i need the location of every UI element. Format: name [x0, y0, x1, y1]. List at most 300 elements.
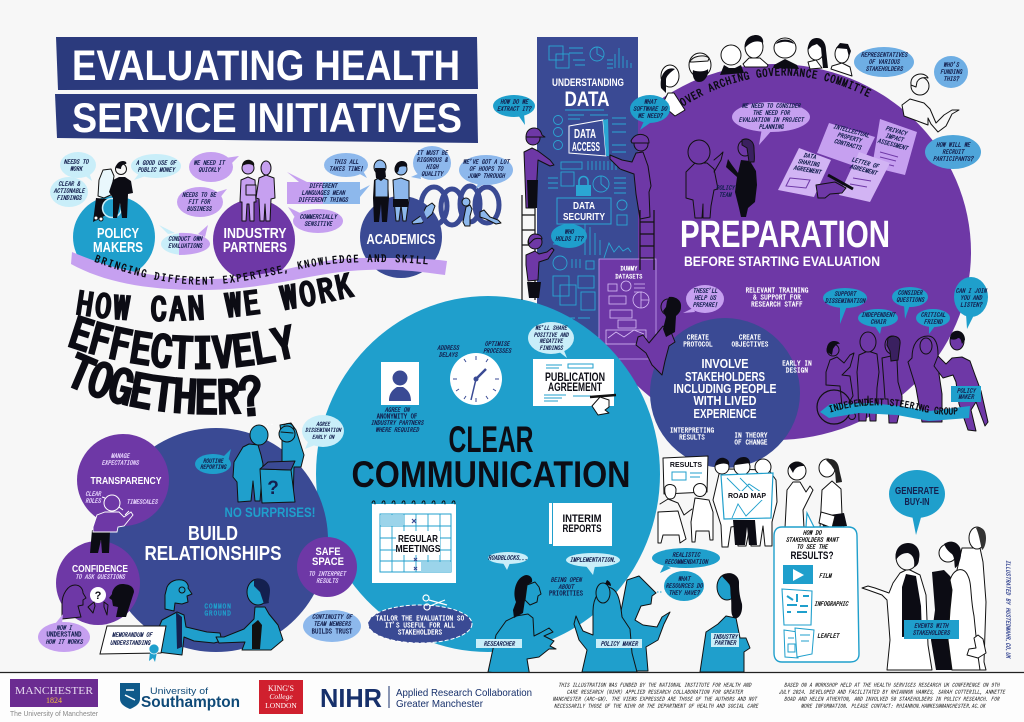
bubble: we've got a lot of hoops to jump through: OF HOOPS TO — [469, 166, 504, 172]
involve stakeholder notes: INTERPRETING — [670, 426, 714, 434]
bubble: a good use of public money: PUBLIC MONEY — [137, 167, 176, 173]
documents — [778, 119, 917, 202]
figures: policy makers — [93, 161, 133, 222]
logo: King's College London: College — [269, 692, 293, 701]
panel: transparency circle: EXPECTATIONS — [101, 460, 139, 466]
memorandum of understanding card: MEMORANDUM OF — [112, 632, 153, 638]
footer — [0, 672, 1024, 722]
panel: transparency circle: TIMESCALES — [127, 499, 158, 505]
figures: opening a box: ? — [267, 478, 279, 499]
publication agreement card: AGREEMENT — [548, 382, 602, 394]
icon: leaflet: LEAFLET — [817, 633, 841, 639]
heading: preparation: PREPARATION — [680, 214, 890, 256]
involve stakeholder notes: OBJECTIVES — [732, 340, 769, 348]
ribbon: independent steering group: INDEPENDENT STEERING GROUP — [828, 398, 958, 415]
label: policy maker — [951, 386, 981, 402]
badge: tailor the evaluation: IT'S USEFUL FOR ALL — [385, 621, 455, 629]
preparation contents — [528, 68, 952, 348]
text: funding statement: NECESSARILY THOSE OF THE NIHR OR THE DEPARTMENT OF HEALTH AND SOCIAL CARE — [554, 703, 759, 709]
bubble: support dissemination — [823, 288, 867, 324]
panel: transparency circle — [77, 434, 169, 526]
bubble: representatives of various stakeholders — [854, 47, 914, 77]
icon: clock — [450, 353, 502, 405]
bubble: needs to be fit for business: BUSINESS — [187, 206, 212, 212]
industry partners circle: INDUSTRY — [224, 226, 287, 242]
bubble: we need to consider: THE NEED FOR — [752, 110, 790, 116]
label: industry partner: PARTNER — [714, 640, 737, 646]
text: workshop statement: BASED ON A WORKSHOP HELD AT THE HEALTH SERVICES RESEARCH UK CONFERENCE ON 9TH — [784, 682, 1000, 688]
label: events with stakeholders: STAKEHOLDERS — [912, 630, 950, 636]
column heading: UNDERSTANDING — [552, 77, 624, 89]
title line 1: EVALUATING HEALTH — [72, 42, 460, 90]
bubble: independent chair: CHAIR — [870, 319, 887, 325]
bubble: we need it quickly: WE NEED IT — [194, 160, 226, 166]
bubble: agree dissemination early on: EARLY ON — [312, 434, 335, 440]
figures: academics — [373, 160, 409, 222]
bubble: clear and actionable findings: FINDINGS — [57, 195, 82, 201]
bubble: this all takes time — [324, 153, 368, 178]
document: letter of agreement: AGREEMENT — [848, 163, 879, 177]
bubble: we need to consider: PLANNING — [759, 124, 784, 130]
figures: opening a box: . . . — [283, 415, 294, 424]
bubble: continuity of team members builds trust: CONTINUITY OF — [312, 614, 353, 620]
label: events with stakeholders — [904, 620, 959, 639]
heading: build relationships — [144, 523, 282, 565]
bubble: we've got a lot of hoops to jump through: JUMP THROUGH — [467, 173, 506, 179]
ribbon: independent steering group — [820, 398, 970, 421]
bubble: what resources do they have: RESOURCES DO — [665, 583, 703, 589]
document: privacy impact assessment: ASSESSMENT — [876, 137, 910, 152]
bubble: roadblocks: ROADBLOCKS... — [488, 555, 528, 561]
bubble: implementation: IMPLEMENTATION. — [570, 557, 616, 563]
heading: clear communication: CLEAR — [448, 419, 534, 460]
bubble: can I join you and listen — [954, 277, 988, 329]
figure: researcher — [476, 575, 556, 677]
figures: policy team — [686, 139, 757, 218]
bubble: we've got a lot of hoops to jump through: WE'VE GOT A LOT — [463, 158, 511, 165]
card: how do stakeholders want to see the results: STAKEHOLDERS WANT — [786, 537, 840, 543]
bubble: how will we recruit participants: RECRUIT — [942, 149, 966, 155]
bubble: what software do we need: SOFTWARE DO — [633, 106, 668, 112]
bubble: how do we extract it: HOW DO WE — [500, 99, 529, 105]
involve stakeholder notes — [670, 333, 769, 446]
bubble: these'll help us prepare — [683, 285, 724, 313]
bubble: we'll share findings: NEGATIVE — [539, 338, 564, 344]
figure: worker left — [524, 128, 554, 208]
bubble: this all takes time: TAKES TIME! — [329, 165, 364, 172]
bubble: now I understand how it works — [38, 614, 90, 652]
bubble: these'll help us prepare: THESE'LL — [693, 287, 718, 294]
academics group — [324, 146, 513, 278]
anonymity card: ANONYMITY OF — [376, 412, 418, 420]
publication agreement card — [533, 359, 616, 415]
panel: dummy datasets — [599, 259, 656, 359]
bubble: it must be rigorous and high quality: RIGOROUS & — [417, 157, 448, 163]
bubble: generate buy-in: GENERATE — [895, 485, 939, 497]
icon: infographic — [782, 589, 849, 625]
document: privacy impact assessment: PRIVACY — [885, 125, 909, 137]
text: relevant training: RESEARCH STAFF — [751, 300, 803, 308]
icon: film — [783, 565, 833, 584]
ladder right — [640, 210, 654, 270]
document: data sharing agreement — [778, 148, 831, 197]
document: intellectual property contracts: PROPERTY — [836, 132, 864, 144]
logo: University of Southampton — [120, 683, 240, 711]
policy maker — [934, 331, 988, 431]
bubble: generate buy-in: BUY-IN — [904, 496, 930, 508]
panel: preparation circle — [579, 64, 971, 440]
bubble: different languages mean different things: DIFFERENT THINGS — [298, 197, 349, 203]
label: policy maker: POLICY — [957, 388, 977, 394]
icon: scissors — [423, 595, 447, 610]
bubble: who's funding this: FUNDING — [940, 69, 963, 75]
face 3 — [720, 45, 744, 75]
face 7 — [831, 43, 852, 76]
bubble: routine reporting: ROUTINE — [203, 458, 224, 464]
label: industry partner — [711, 633, 739, 647]
panel: safe space circle: SAFE — [316, 546, 340, 558]
text: being open about priorities: ABOUT — [557, 584, 576, 590]
card: how do stakeholders want to see the results: RESULTS? — [790, 550, 834, 562]
figure: policy maker and colleague — [574, 576, 670, 672]
results board and seated people: RESULTS — [670, 462, 702, 469]
figure: transparency person — [90, 495, 133, 553]
figure: worker right — [610, 134, 651, 219]
text: policy team: POLICY — [716, 185, 736, 191]
heading: how can we work effectively together: TOGETHER? — [70, 351, 261, 417]
anonymity card: WHERE REQUIRED — [375, 427, 420, 433]
policy makers circle — [73, 196, 155, 278]
text: common ground: GROUND — [204, 609, 232, 617]
figures: stakeholder event group — [862, 527, 986, 670]
figure: bearded man with bubble — [636, 285, 724, 375]
panel: confidence circle — [56, 541, 140, 625]
panel: dummy datasets: DUMMY — [621, 264, 638, 272]
bubble: different languages mean different things: DIFFERENT — [309, 183, 339, 189]
data workers on ladders — [522, 128, 654, 300]
woman with scarf — [908, 336, 942, 422]
bubble: representatives of various stakeholders: REPRESENTATIVES — [861, 52, 908, 58]
panel: safe space circle: RESULTS — [316, 578, 339, 584]
text: funding statement: MANCHESTER (ARC-GM). THE VIEWS EXPRESSED ARE THOSE OF THE AUTHORS AND NOT — [553, 696, 758, 702]
man — [857, 332, 879, 421]
figures: two people talking — [785, 459, 847, 528]
logo: University of Southampton: University of — [150, 686, 208, 697]
bubble: support dissemination: SUPPORT — [834, 291, 858, 297]
credit: illustrator: ILLUSTRATED BY HUSTEDMAHR.CO.UK — [1005, 560, 1011, 660]
bubble: a good use of public money — [131, 154, 181, 180]
bubble: a good use of public money: A GOOD USE OF — [135, 160, 177, 166]
independent steering group — [816, 277, 988, 432]
icon: film: FILM — [819, 573, 833, 579]
calendar: regular meetings: REGULAR — [398, 533, 438, 545]
document: data sharing agreement: DATA — [803, 152, 817, 160]
text: being open about priorities: PRIORITIES — [549, 589, 584, 597]
column heading — [552, 77, 624, 111]
text: optimise processes: PROCESSES — [483, 348, 512, 354]
involve stakeholder notes: IN THEORY — [734, 431, 768, 439]
panel: transparency circle: MANAGE — [111, 453, 130, 459]
logo: University of Manchester: MANCHESTER — [15, 685, 94, 697]
ladder left — [522, 195, 535, 300]
bubble: consider questions — [892, 287, 928, 319]
face 6 — [808, 38, 828, 69]
heading: clear communication: COMMUNICATION — [352, 454, 630, 495]
figures: opening a box: . . . — [262, 418, 273, 427]
industry partners circle: PARTNERS — [223, 240, 287, 256]
panel: safe space circle: TO INTERPRET — [308, 571, 347, 577]
badge: tailor the evaluation: TAILOR THE EVALUATION SO — [376, 614, 465, 622]
icon: leaflet — [784, 628, 841, 658]
involve stakeholder notes: PROTOCOL — [683, 340, 713, 348]
bubble: who's funding this — [934, 56, 968, 88]
bubble: independent chair: INDEPENDENT — [861, 312, 897, 318]
bubble: we'll share findings: FINDINGS — [539, 345, 564, 351]
bubble: who's funding this: WHO'S — [943, 61, 960, 68]
hoops and crawling people — [412, 186, 501, 226]
memorandum of understanding card: UNDERSTANDING — [110, 640, 151, 646]
anonymity card: INDUSTRY PARTNERS — [371, 420, 424, 426]
face 4 — [743, 35, 768, 67]
title banner — [55, 37, 478, 143]
label: policy maker: POLICY MAKER — [600, 641, 638, 647]
bubble: needs to be fit for business — [177, 187, 227, 217]
heading: how can we work effectively together: HOW CAN WE WORK — [76, 272, 356, 322]
memorandum of understanding card — [100, 626, 166, 662]
bubble: conduct own evaluations: EVALUATIONS — [168, 243, 203, 249]
bubble: roadblocks — [488, 552, 528, 570]
bubble: clear and actionable findings — [50, 177, 88, 207]
bubble: how will we recruit participants: HOW WILL WE — [936, 142, 971, 148]
bubble: what resources do they have: WHAT — [678, 576, 692, 582]
heading: how can we work effectively together: EFFECTIVELY — [68, 315, 292, 370]
bubble: how will we recruit participants — [925, 135, 981, 169]
bubble: it must be rigorous and high quality: QUALITY — [421, 171, 445, 177]
badge: tailor the evaluation: STAKEHOLDERS — [398, 628, 442, 636]
bubble: needs to be fit for business: NEEDS TO BE — [182, 192, 217, 198]
text: workshop statement: BOAD AND HELEN ATHERTON, AND INVOLVED 50 STAKEHOLDERS IN POLICY RESEARCH. FOR — [784, 696, 1000, 702]
interim reports card — [549, 503, 612, 546]
figures: industry partners — [240, 160, 275, 221]
document: privacy impact assessment — [872, 119, 917, 175]
industry partners circle — [213, 199, 295, 281]
bubble: how do we extract it: EXTRACT IT? — [497, 105, 533, 112]
text: workshop statement: JULY 2024. DEVELOPED AND FACILITATED BY RHIANNON HAWKES, SARAH COTTERILL, ANNETTE — [778, 689, 1006, 695]
logo: NIHR ARC Greater Manchester — [320, 683, 532, 713]
card: how do stakeholders want to see the results: HOW DO — [803, 530, 822, 536]
icon: rosette — [149, 644, 159, 662]
bubble: who's funding this: THIS? — [943, 75, 961, 82]
bubble: it must be rigorous and high quality: HIGH — [426, 164, 440, 170]
bubble: clear and actionable findings: CLEAR & — [58, 181, 81, 187]
label: researcher: RESEARCHER — [484, 641, 515, 647]
text: optimise processes: OPTIMISE — [485, 341, 510, 347]
bubble: now I understand how it works: NOW I — [56, 625, 73, 631]
academics circle — [360, 196, 442, 278]
icon: padlock — [576, 176, 591, 196]
wheelchair user — [817, 341, 856, 424]
panel: build relationships circle — [104, 428, 328, 652]
bubble: we'll share findings: WE'LL SHARE — [535, 325, 568, 331]
title line 2: SERVICE INITIATIVES — [72, 94, 462, 141]
logo: University of Manchester — [10, 679, 99, 718]
text: funding statement: THIS ILLUSTRATION WAS FUNDED BY THE NATIONAL INSTITUTE FOR HEALTH AND — [558, 682, 752, 688]
involve stakeholders heading: EXPERIENCE — [694, 406, 757, 421]
logo: NIHR ARC Greater Manchester: Greater Manchester — [396, 698, 483, 710]
text: relevant training: RELEVANT TRAINING — [746, 286, 809, 294]
bubble: generate buy-in — [889, 470, 945, 535]
build relationships contents — [144, 415, 316, 655]
label: industry partner: INDUSTRY — [713, 634, 739, 640]
woman — [882, 336, 902, 423]
bubble: different languages mean different things — [287, 172, 370, 204]
icon: writing hand — [590, 395, 616, 415]
bubble: we'll share findings — [528, 322, 574, 358]
bubble: we'll share findings: POSITIVE AND — [534, 332, 569, 338]
note: early in design: EARLY IN — [782, 359, 812, 367]
road map and group — [713, 457, 777, 547]
bubble: now I understand how it works: UNDERSTAND — [46, 630, 82, 638]
publication agreement card: PUBLICATION — [545, 372, 605, 384]
panel: safe space circle: SPACE — [312, 556, 344, 568]
logo: NIHR ARC Greater Manchester: NIHR — [320, 683, 382, 713]
heading: preparation — [680, 214, 890, 269]
heading: preparation: BEFORE STARTING EVALUATION — [684, 253, 880, 269]
document: intellectual property contracts: CONTRACTS — [833, 138, 863, 151]
text: no surprises: NO SURPRISES! — [224, 504, 316, 520]
card: how do stakeholders want to see the results: TO SEE THE — [797, 544, 828, 550]
bubble: consider questions: QUESTIONS — [896, 297, 925, 303]
bubble: commercially sensitive — [288, 207, 343, 233]
involve stakeholder notes: CREATE — [687, 333, 709, 341]
calendar: regular meetings: MEETINGS — [396, 543, 440, 555]
anonymity card — [371, 362, 424, 433]
document: intellectual property contracts: INTELLECTUAL — [832, 123, 871, 139]
figure: man pondering — [902, 74, 959, 132]
bubble: what software do we need: WHAT — [644, 99, 658, 105]
bubble: conduct own evaluations — [159, 225, 210, 255]
badge: tailor the evaluation — [368, 595, 472, 643]
logo: King's College London — [259, 680, 303, 714]
involve stakeholders heading: INCLUDING PEOPLE — [674, 381, 777, 396]
icon: infographic: INFOGRAPHIC — [814, 601, 849, 607]
bubble: critical friend: CRITICAL — [921, 312, 946, 318]
bubble: who holds it: HOLDS IT? — [555, 235, 585, 242]
text: policy team: TEAM — [719, 192, 733, 198]
text: address delays: DELAYS — [439, 352, 458, 358]
bubble: continuity of team members builds trust: TEAM MEMBERS — [313, 621, 351, 627]
bubble: these'll help us prepare: PREPARE! — [693, 301, 718, 308]
bubble: how do we extract it — [493, 95, 535, 125]
policy makers circle: POLICY — [97, 226, 139, 242]
bubble: what software do we need — [630, 95, 670, 130]
bubble: we need to consider: EVALUATION IN PROJECT — [739, 117, 805, 123]
academics circle: ACADEMICS — [366, 232, 436, 248]
label: policy maker: MAKER — [958, 394, 975, 400]
document: letter of agreement: LETTER OF — [851, 157, 880, 170]
text: address delays: ADDRESS — [436, 345, 460, 351]
heading: clear communication — [352, 419, 630, 495]
data security box: DATA — [573, 200, 595, 212]
bubble: what resources do they have: THEY HAVE? — [669, 589, 701, 596]
bubble: needs to work: NEEDS TO — [64, 159, 89, 165]
bubble: needs to be fit for business: FIT FOR — [188, 199, 211, 205]
bubble: what software do we need: WE NEED? — [638, 112, 664, 119]
heading: how can we work effectively together — [68, 272, 356, 417]
panel: clear communication circle — [316, 296, 660, 652]
bubble: what resources do they have — [657, 571, 704, 601]
calendar: regular meetings — [372, 501, 456, 583]
icon: question mark: ? — [95, 590, 102, 602]
bubble: representatives of various stakeholders: OF VARIOUS — [869, 59, 900, 65]
interim reports card: INTERIM — [562, 513, 602, 525]
bubble: agree dissemination early on — [302, 415, 344, 449]
bubble: we need it quickly — [189, 152, 239, 182]
label: events with stakeholders: EVENTS WITH — [914, 623, 950, 629]
bubble: we've got a lot of hoops to jump through — [459, 155, 513, 189]
bubble: agree dissemination early on: DISSEMINATION — [305, 427, 342, 433]
involve stakeholders heading: INVOLVE — [702, 356, 749, 371]
data security box — [557, 198, 611, 224]
bubble: it must be rigorous and high quality: IT MUST BE — [417, 150, 448, 156]
bubble: different languages mean different things: LANGUAGES MEAN — [301, 190, 347, 196]
bubble: can I join you and listen: CAN I JOIN — [956, 288, 988, 294]
face 5 — [773, 38, 799, 69]
bubble: needs to work — [60, 152, 96, 181]
heading: build relationships: BUILD — [188, 523, 238, 545]
card: how do stakeholders want to see the results — [774, 513, 859, 662]
figures: two people asking — [62, 584, 134, 619]
bubble: commercially sensitive: COMMERCIALLY — [299, 214, 338, 220]
industry partners group — [177, 152, 343, 281]
bubble: these'll help us prepare: HELP US — [694, 295, 717, 301]
bubble: continuity of team members builds trust — [303, 610, 361, 642]
figures: stakeholder faces on committee arc — [661, 35, 852, 116]
figure: worker below — [526, 234, 554, 298]
note: early in design: DESIGN — [786, 366, 808, 374]
panel: transparency circle: CLEAR — [85, 491, 102, 497]
clear communication contents — [352, 322, 630, 643]
bubble: clear and actionable findings: ACTIONABLE — [53, 188, 85, 194]
bubble: now I understand how it works: HOW IT WORKS — [45, 639, 83, 645]
text: workshop statement: MORE INFORMATION. PLEASE CONTACT: RHIANNON.HAWKES@MANCHESTER.AC.UK — [801, 703, 986, 709]
bubble: implementation — [566, 553, 620, 575]
bubble: routine reporting: REPORTING — [200, 464, 227, 470]
anonymity card: AGREE ON — [384, 407, 411, 413]
involve stakeholder notes: CREATE — [739, 333, 761, 341]
data access card: ACCESS — [572, 139, 600, 154]
data access card — [569, 119, 609, 156]
involve stakeholders heading: STAKEHOLDERS — [685, 369, 765, 384]
text: funding statement: CARE RESEARCH (NIHR) APPLIED RESEARCH COLLABORATION FOR GREATER — [566, 689, 744, 695]
ribbon: bringing different expertise — [71, 252, 447, 290]
bubble: this all takes time: THIS ALL — [334, 159, 359, 165]
document: intellectual property contracts — [817, 123, 875, 168]
face 1 — [661, 65, 685, 116]
involve stakeholders heading: WITH LIVED — [694, 393, 756, 408]
bubble: how will we recruit participants: PARTICIPANTS? — [933, 155, 975, 162]
involve stakeholder notes: RESULTS — [679, 433, 705, 441]
figures: steering group — [817, 331, 988, 431]
bubble: continuity of team members builds trust: BUILDS TRUST — [312, 627, 353, 635]
bubble: realistic recommendation: RECOMMENDATION — [664, 559, 710, 565]
panel: transparency circle: ROLES — [85, 498, 102, 504]
bubble: we need to consider: WE NEED TO CONSIDER — [742, 103, 801, 109]
document: letter of agreement — [839, 152, 890, 202]
bubble: support dissemination: DISSEMINATION — [825, 298, 867, 304]
logo: University of Manchester: 1824 — [46, 696, 62, 705]
logo: University of Manchester: The University of Manchester — [10, 711, 99, 718]
